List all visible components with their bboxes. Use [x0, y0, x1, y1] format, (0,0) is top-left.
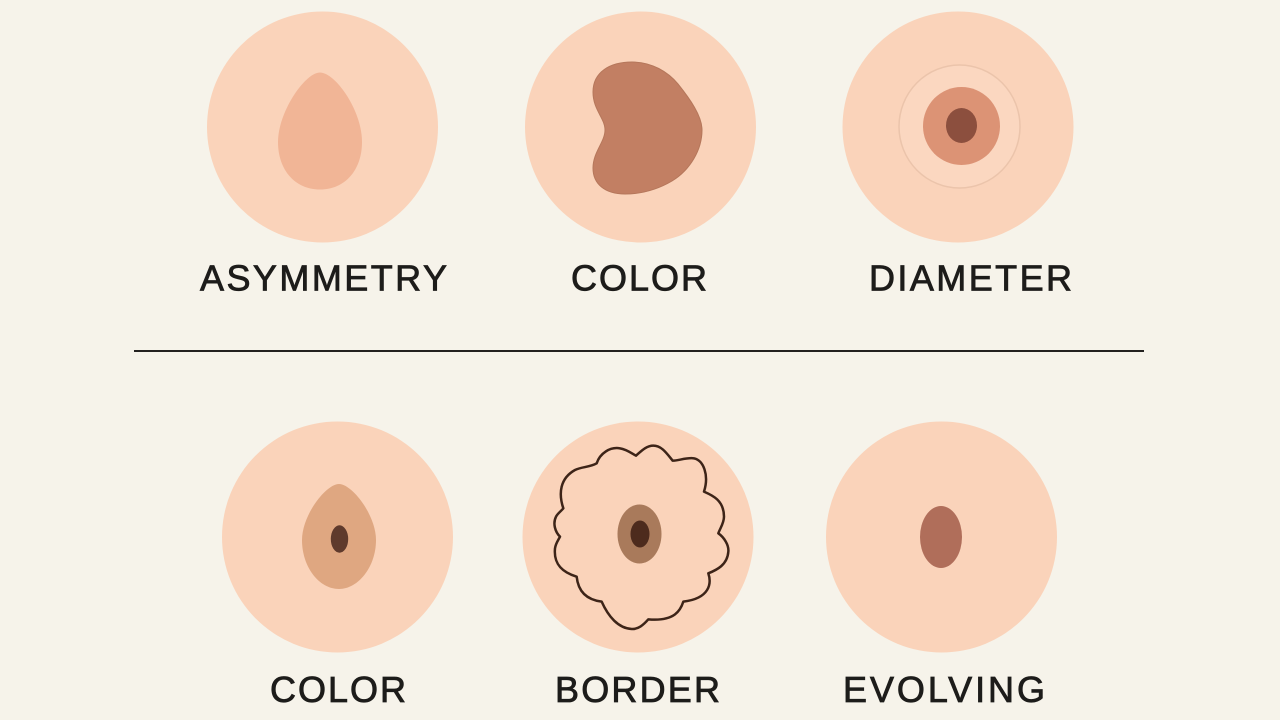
label: color bottom: COLOR [270, 669, 406, 710]
panel: diameter [842, 12, 1074, 298]
lesion: middle disc [923, 87, 1000, 165]
lesion: tan drop [302, 484, 376, 589]
lesion: dark core [630, 520, 650, 548]
label: diameter: DIAMETER [869, 258, 1072, 298]
label: border: BORDER [555, 669, 720, 710]
panel: asymmetry [200, 12, 447, 298]
label: color top: COLOR [571, 258, 707, 298]
lesion: dark centre [946, 108, 977, 143]
skin circle: color bottom [222, 422, 453, 652]
diameter ring [899, 65, 1020, 188]
panel: color bottom [222, 422, 453, 710]
irregular border outline [554, 446, 728, 629]
divider line [134, 350, 1144, 352]
lesion: brown oval [618, 504, 662, 564]
skin circle: asymmetry [207, 12, 438, 242]
lesion: kidney shape [593, 62, 702, 194]
panel: border [522, 422, 754, 710]
panel: evolving [826, 422, 1057, 710]
skin circle: border [522, 422, 754, 652]
panel: color top [525, 12, 756, 298]
label: asymmetry: ASYMMETRY [200, 258, 447, 298]
label: evolving: EVOLVING [843, 669, 1045, 710]
lesion: dark spot [331, 525, 348, 553]
lesion: oval [920, 506, 962, 568]
skin circle: diameter [842, 12, 1074, 242]
lesion: asymmetric teardrop [278, 72, 362, 190]
skin circle: evolving [826, 422, 1057, 652]
skin circle: color top [525, 12, 756, 242]
